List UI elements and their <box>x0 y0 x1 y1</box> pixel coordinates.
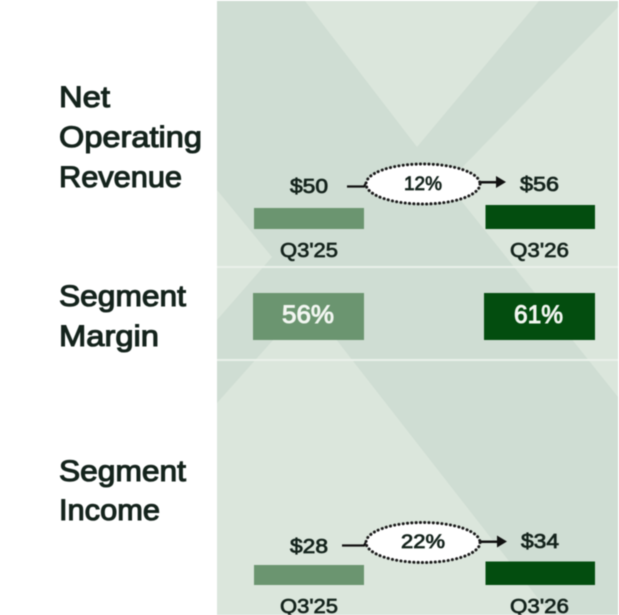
bar: Q3'26 revenue <box>486 205 595 229</box>
label: Q3'25: Q3'25 <box>280 240 338 262</box>
value: $34: $34 <box>521 531 559 553</box>
label: Q3'26: Q3'26 <box>510 240 569 262</box>
bar: Q3'26 income <box>486 562 595 585</box>
arrow <box>481 536 507 548</box>
heading: Segment Income <box>59 455 187 527</box>
value: $28: $28 <box>290 536 328 558</box>
bar: 61%: 61% <box>514 301 563 329</box>
panel: patterned background <box>217 1 618 615</box>
growth oval: 22% <box>366 522 480 562</box>
heading: Net Operating Revenue: Net <box>59 81 111 114</box>
heading: Segment Income: Segment <box>59 455 187 488</box>
growth oval: 12%: 12% <box>404 174 442 195</box>
bar: 56% <box>253 293 364 340</box>
chart: segment income comparison <box>254 522 595 615</box>
chart: segment margin comparison <box>253 293 595 340</box>
heading: Net Operating Revenue: Operating <box>59 121 202 154</box>
heading: Segment Margin: Segment <box>59 280 187 313</box>
heading: Segment Margin: Margin <box>59 320 159 353</box>
bar: Q3'25 revenue <box>254 208 364 229</box>
bar: 61% <box>484 293 595 340</box>
growth oval: 22%: 22% <box>401 532 445 553</box>
chart: net operating revenue comparison <box>254 164 595 262</box>
heading: Segment Margin <box>59 280 187 353</box>
connector line <box>342 542 366 546</box>
bar: Q3'25 income <box>254 565 364 585</box>
growth oval: 12% <box>366 164 480 204</box>
heading: Net Operating Revenue <box>59 81 202 194</box>
arrow <box>481 176 506 188</box>
value: $50: $50 <box>290 176 328 198</box>
connector line <box>347 183 366 186</box>
value: $56: $56 <box>520 174 559 196</box>
bar: 56%: 56% <box>282 301 334 329</box>
heading: Segment Income: Income <box>59 494 160 527</box>
heading: Net Operating Revenue: Revenue <box>59 161 182 194</box>
